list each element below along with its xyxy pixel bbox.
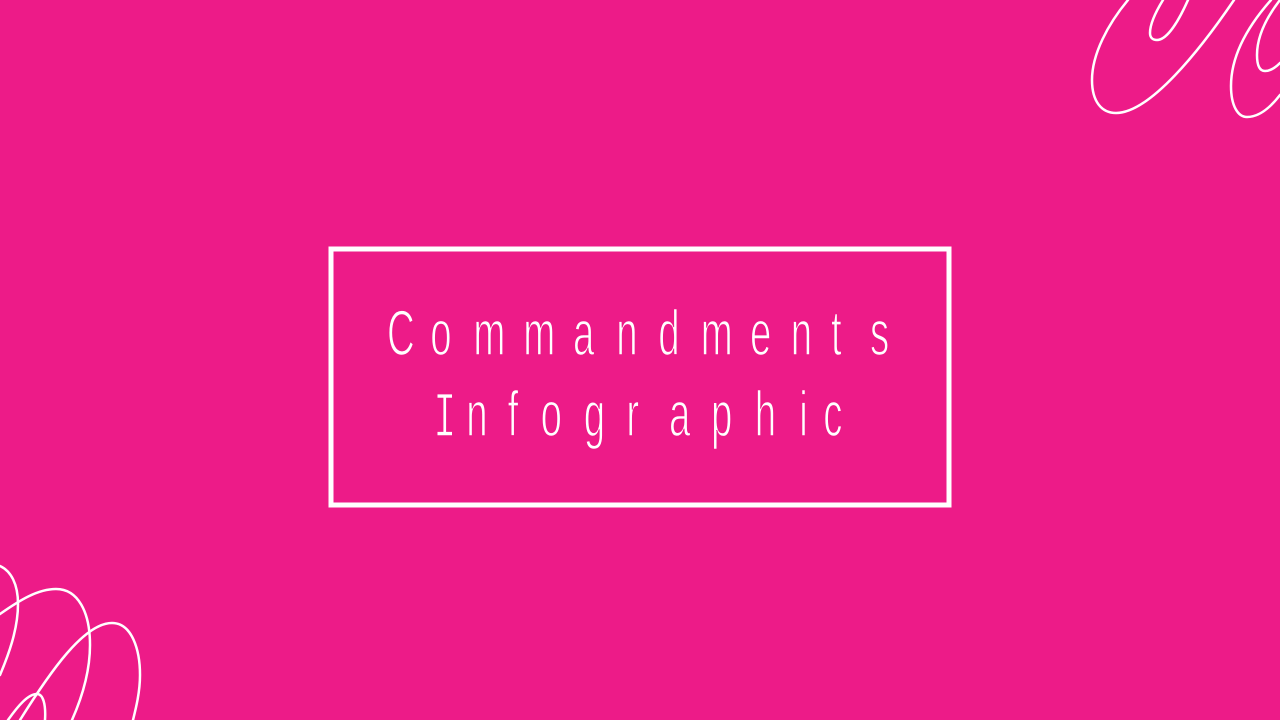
title frame bbox=[331, 249, 949, 505]
title: Commandments Infographic bbox=[387, 298, 889, 455]
title line 2: I bbox=[433, 383, 456, 455]
decoration: bottom-left scribble bbox=[0, 566, 140, 720]
decoration: top-right scribble bbox=[1092, 0, 1280, 117]
title line 1: Commandments bbox=[387, 298, 889, 370]
title line 2: nfographic bbox=[466, 379, 842, 451]
